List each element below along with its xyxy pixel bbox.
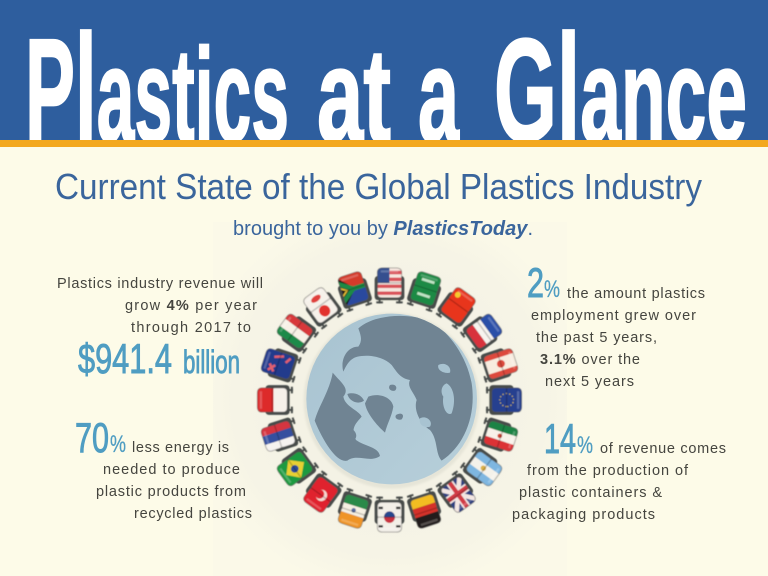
chair: Iran bbox=[477, 416, 520, 455]
panel: employment stat bbox=[527, 259, 705, 390]
chair: Japan bbox=[302, 286, 344, 330]
panel: revenue stat: grow 4% per year bbox=[125, 298, 257, 314]
chair: European Union bbox=[486, 385, 522, 415]
centre panel bbox=[213, 222, 567, 576]
chair: South Korea bbox=[375, 496, 404, 532]
title: a bbox=[418, 22, 460, 170]
panel: packaging stat: plastic containers & bbox=[519, 485, 662, 501]
panel: energy stat: % bbox=[110, 431, 126, 458]
subtitle: Current State of the Global Plastics Industry bbox=[55, 166, 702, 207]
chair: France bbox=[460, 313, 503, 354]
chair: Brazil bbox=[276, 446, 320, 487]
panel: employment stat: % bbox=[544, 276, 560, 303]
panel: employment stat: the past 5 years, bbox=[536, 330, 657, 346]
chair: Turkey bbox=[302, 470, 344, 514]
panel: energy stat: 70 bbox=[75, 414, 109, 461]
chair: Indonesia bbox=[257, 385, 293, 415]
chair: India bbox=[335, 487, 374, 530]
title bbox=[25, 3, 747, 174]
chair: China bbox=[435, 286, 476, 330]
orange rule bbox=[0, 140, 768, 147]
chair: USA bbox=[375, 268, 404, 304]
chair: Australia bbox=[259, 345, 302, 384]
title: at bbox=[317, 22, 391, 170]
panel: revenue stat: Plastics industry revenue will bbox=[57, 276, 263, 292]
panel: employment stat: the amount plastics bbox=[567, 286, 705, 302]
chair: South Africa bbox=[337, 270, 373, 313]
panel: packaging stat: packaging products bbox=[512, 507, 655, 523]
panel: energy stat: plastic products from bbox=[96, 484, 246, 500]
panel: revenue stat: $941.4 bbox=[78, 335, 172, 382]
panel: energy stat: needed to produce bbox=[103, 462, 240, 478]
chair: Italy bbox=[276, 313, 320, 354]
title: Plastics bbox=[25, 3, 289, 174]
panel: packaging stat: of revenue comes bbox=[600, 441, 726, 457]
chair: Russia bbox=[259, 416, 302, 455]
panel: energy stat bbox=[75, 414, 252, 522]
panel: revenue stat: through 2017 to bbox=[131, 320, 251, 336]
panel: packaging stat: % bbox=[577, 432, 593, 459]
panel: packaging stat: from the production of bbox=[527, 463, 689, 479]
chair: Argentina bbox=[460, 446, 503, 487]
chair: Germany bbox=[405, 487, 444, 530]
byline: brought to you by PlasticsToday. bbox=[233, 218, 533, 240]
globe bbox=[304, 313, 480, 489]
panel: revenue stat: billion bbox=[183, 344, 240, 380]
chair: United Kingdom bbox=[435, 470, 476, 514]
panel: energy stat: recycled plastics bbox=[134, 506, 252, 522]
panel: revenue stat bbox=[57, 276, 263, 382]
panel: employment stat: 2 bbox=[527, 259, 544, 306]
panel: employment stat: next 5 years bbox=[545, 374, 634, 390]
panel: packaging stat: 14 bbox=[544, 415, 576, 462]
chair: Canada bbox=[477, 345, 520, 384]
panel: employment stat: employment grew over bbox=[531, 308, 696, 324]
chairs ring bbox=[257, 268, 522, 532]
header band bbox=[0, 0, 768, 141]
panel: packaging stat bbox=[512, 415, 726, 523]
chair: Saudi Arabia bbox=[405, 270, 444, 313]
panel: employment stat: 3.1% over the bbox=[540, 352, 640, 368]
panel: energy stat: less energy is bbox=[132, 440, 229, 456]
